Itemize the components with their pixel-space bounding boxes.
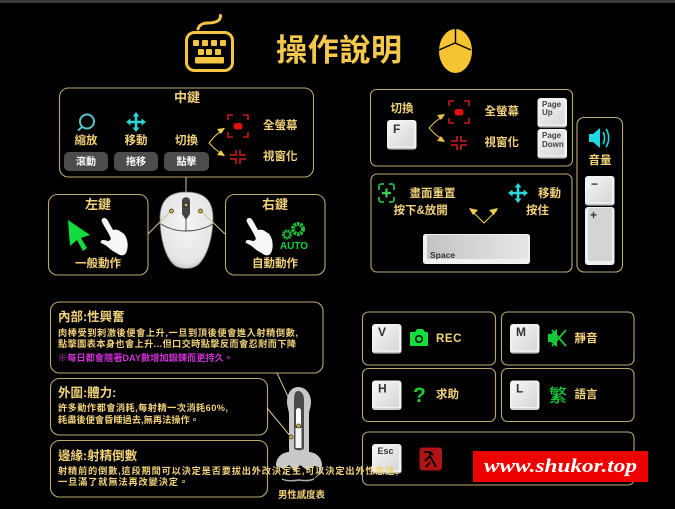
key: F: F (393, 122, 400, 136)
key: F (387, 120, 416, 150)
icon: fullscreen (228, 115, 248, 137)
button: scroll: 滾動 (76, 155, 96, 168)
icon: help: ? (413, 384, 426, 407)
top bar (0, 0, 675, 3)
icon: green cursor (68, 220, 90, 251)
icon: camera (410, 329, 428, 346)
illustration: mouse (148, 192, 225, 268)
label: mute: 靜音 (574, 331, 598, 345)
label: rec: REC (436, 333, 462, 345)
panel: L key (502, 368, 634, 422)
panel: F key (370, 90, 572, 166)
text: countdown second line: 一旦滿了就無法再改變決定。 (58, 476, 188, 487)
icon: fullscreen (449, 101, 469, 123)
text: arousal body second line: 點擊圖表本身也會上升...但口交時點擊反而會忍耐而下降 (58, 338, 297, 349)
button: drag: 拖移 (126, 155, 146, 168)
banner: watermark: www.shukor.top (484, 456, 637, 477)
icon: windowed (230, 150, 246, 164)
icon: traditional chinese: 繁 (549, 386, 567, 406)
label: normal action: 一般動作 (75, 256, 121, 270)
key: H: H (378, 382, 387, 396)
label: auto action: 自動動作 (252, 256, 298, 270)
panel: middle button (60, 88, 314, 177)
panel: left button (48, 194, 148, 275)
icon: hand (246, 218, 273, 255)
heading: left button: 左鍵 (85, 197, 111, 212)
key: space: Space (430, 250, 455, 260)
key: page up: Up (542, 108, 553, 117)
text: arousal body: 肉棒受到刺激後便會上升,一旦到頂後便會進入射精倒數, (58, 327, 298, 338)
key: page down (538, 129, 567, 158)
text: stamina body second line: 耗盡後便會昏睡過去,無再法操作。 (58, 414, 199, 425)
label: hold: 按住 (526, 203, 549, 217)
label: windowed: 視窗化 (484, 135, 519, 149)
key: page up (538, 98, 567, 128)
chart: male sensitivity gauge (267, 373, 322, 481)
icon: speaker (589, 128, 609, 148)
key: Esc: Esc (378, 446, 394, 456)
label: fullscreen: 全螢幕 (263, 118, 298, 132)
heading: countdown: 邊緣:射精倒數 (58, 448, 138, 463)
banner: watermark (473, 451, 648, 482)
note: daily: ※每日都會隨著DAY數增加鍛鍊而更持久。 (58, 352, 233, 363)
label: windowed: 視窗化 (263, 149, 298, 163)
label: reset view: 畫面重置 (410, 186, 456, 200)
title: 操作說明 (276, 33, 402, 68)
heading: arousal: 內部:性興奮 (58, 309, 125, 324)
key: space (423, 234, 530, 264)
label: help: 求助 (436, 387, 459, 401)
panel: H key (362, 368, 496, 422)
icon: keyboard (186, 16, 232, 70)
label: language: 語言 (574, 387, 598, 401)
icon: mouse (439, 29, 472, 73)
icon: move (508, 183, 528, 203)
icon: mute (548, 329, 566, 347)
panel: outer stamina (50, 378, 268, 435)
key: page up: Page (542, 100, 562, 109)
button: scroll (64, 152, 108, 171)
label: move: 移動 (538, 186, 561, 200)
heading: middle button: 中鍵 (174, 90, 200, 105)
panel: inner arousal (50, 302, 323, 373)
label: move: 移動 (124, 133, 148, 147)
key: plus: + (590, 208, 597, 222)
key: page down: Down (542, 140, 564, 149)
text: stamina body: 許多動作都會消耗,每射精一次消耗60%, (58, 402, 228, 413)
button: click (164, 152, 209, 171)
panel: Esc key (362, 432, 634, 485)
panel: edge countdown (50, 440, 268, 497)
connector: middle button (185, 177, 187, 204)
text: countdown overlay line: 射精前的倒數,這段期間可以決定是否要拔出外改決定生,可以決定出外性急速, (58, 465, 398, 476)
key: minus: − (591, 177, 598, 191)
key: L: L (516, 382, 523, 396)
label: zoom: 縮放 (74, 133, 98, 147)
label: switch: 切換 (390, 101, 414, 115)
icon: red exit stamp (420, 448, 442, 470)
panel: V key (362, 312, 496, 365)
label: switch: 切換 (175, 133, 198, 147)
key: minus (585, 176, 614, 206)
label: volume: 音量 (588, 153, 612, 167)
panel: right button (226, 194, 325, 275)
icon: auto gears: AUTO (280, 240, 308, 252)
icon: reset view (379, 184, 394, 202)
arrows: switch (429, 114, 445, 142)
button: click: 點擊 (176, 155, 196, 168)
panel: volume (577, 118, 622, 272)
key: M: M (516, 325, 526, 339)
icon: windowed (451, 136, 467, 150)
key: page down: Page (542, 131, 562, 140)
icon: zoom (78, 114, 94, 130)
label: fullscreen: 全螢幕 (484, 104, 519, 118)
arrows: switch (209, 128, 225, 156)
icon: move (126, 112, 146, 132)
arrows: space (469, 208, 498, 223)
heading: right button: 右鍵 (262, 197, 288, 212)
panel: space key (371, 174, 572, 272)
button: drag (114, 152, 158, 171)
key: plus (585, 207, 614, 265)
label: press and release: 按下&放開 (394, 203, 448, 217)
key: Esc (372, 444, 402, 474)
label: gauge: 男性感度表 (278, 489, 325, 501)
panel: M key (502, 312, 634, 365)
heading: stamina: 外圍:體力: (58, 385, 116, 400)
icon: hand (101, 218, 128, 255)
key: V: V (378, 325, 386, 339)
